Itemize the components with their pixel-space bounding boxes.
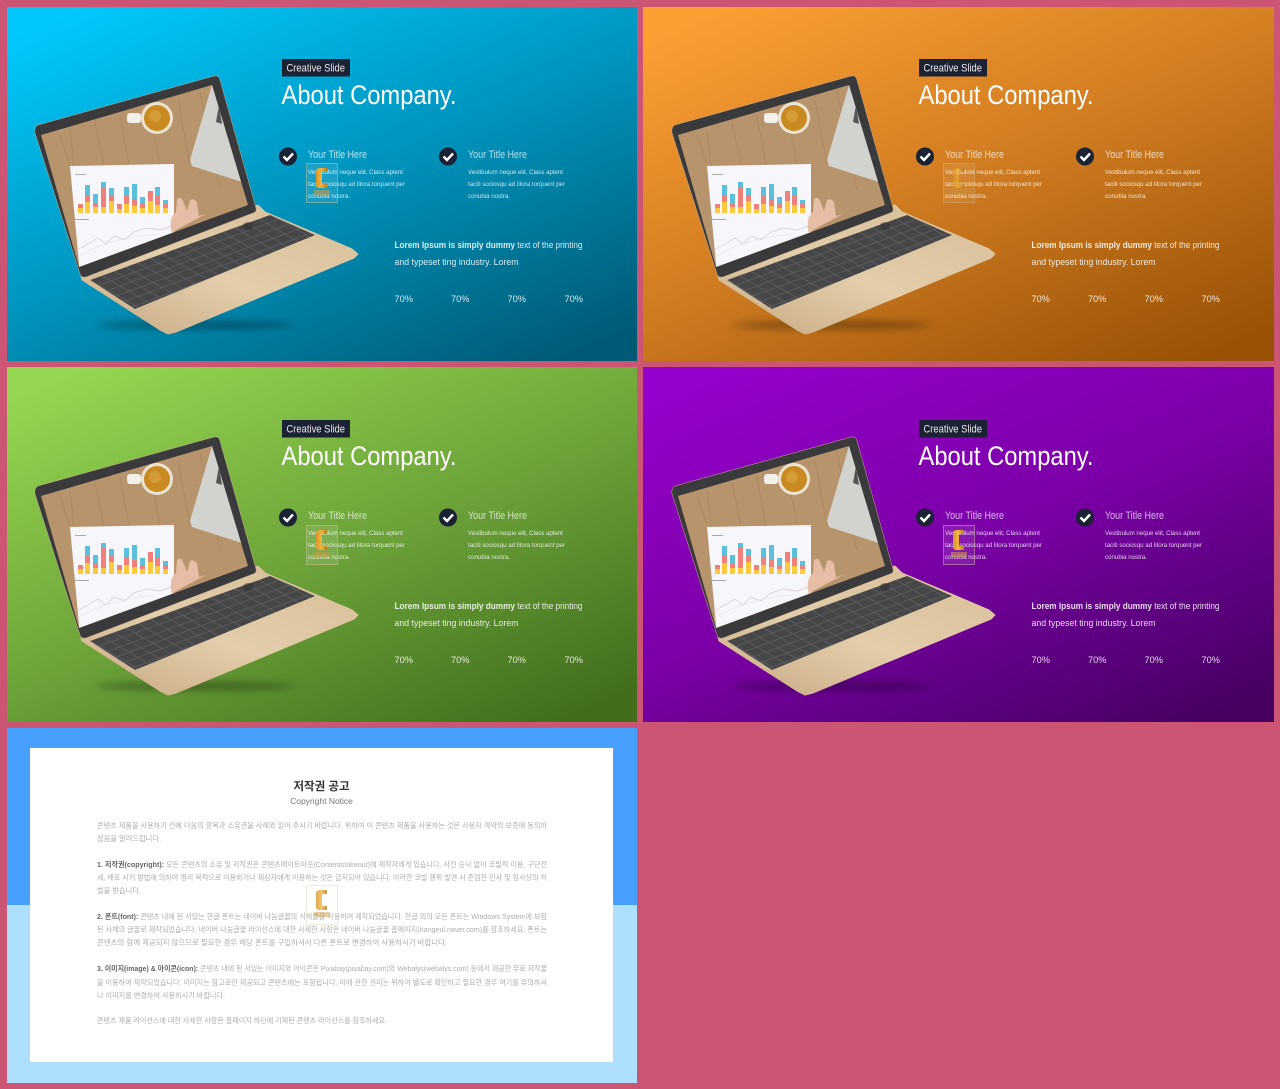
- feature 2: conubia nostra.: [468, 554, 510, 561]
- feature 1: [916, 508, 1043, 561]
- notice section 3: [97, 964, 547, 1000]
- laptop mockup: [672, 437, 995, 695]
- notice section 1: [97, 860, 547, 895]
- notice section 1: 세, 배포 시키 방법에 의하여 영리 목적으로 이용하거나 제삼자에게 이용하는 것은 금지되어 있습니다. 이러한 코빌 행위 발견 시 준엄한 민사 및 형사상의 처: [97, 873, 547, 882]
- notice section 3: 나 이미지를 변경하여 사용하시기 바랍니다.: [97, 991, 225, 1000]
- tag: Creative Slide: Creative Slide: [286, 424, 345, 436]
- feature 2: conubia nostra.: [1105, 193, 1147, 200]
- notice section 2: 2. 폰트(font): 콘텐츠 내에 된 서있는 한글 폰트는 네이버 나눔글꼴의 서체들을 사용하여 제작되었습니다. 한글 외의 모든 폰트는 Windows System에 보함: [97, 912, 547, 921]
- percentages: 70%: [564, 294, 584, 305]
- tag: Creative Slide: [282, 420, 350, 438]
- feature 1: taciti sociosqu ad litora torquent per: [308, 181, 406, 188]
- laptop mockup: [672, 76, 995, 334]
- percentages: 70%: [1202, 655, 1221, 666]
- percentages: 70%: [1202, 294, 1221, 305]
- description: and typeset ting industry. Lorem: [394, 618, 519, 629]
- feature 2: [1076, 508, 1203, 561]
- laptop mockup: [35, 437, 358, 695]
- feature 1: [916, 148, 1043, 200]
- watermark: [306, 164, 338, 202]
- percentages: 70%: [1032, 655, 1051, 666]
- tag: Creative Slide: [282, 59, 350, 76]
- percentages: 70%: [508, 294, 527, 305]
- feature 2: taciti sociosqu ad litora torquent per: [468, 542, 566, 549]
- feature 1: conubia nostra.: [308, 554, 350, 561]
- description: and typeset ting industry. Lorem: [1032, 257, 1156, 268]
- watermark: [944, 526, 974, 564]
- percentages: 70%: [1088, 655, 1107, 666]
- notice intro: 셨음을 알려드립니다.: [97, 834, 161, 843]
- feature 1: Vestibulum neque elit, Class aptent: [945, 169, 1040, 176]
- feature 1: conubia nostra.: [308, 193, 350, 200]
- tag: Creative Slide: Creative Slide: [924, 62, 982, 74]
- watermark: [306, 886, 338, 924]
- tag: Creative Slide: [919, 59, 987, 76]
- notice heading: 저작권 공고: [293, 779, 350, 793]
- feature 2: [439, 508, 566, 561]
- percentages: 70%: [508, 655, 527, 666]
- description: [1032, 601, 1220, 629]
- notice closing: 콘텐츠 제품 라이선스에 대한 사세한 사항은 홈페이지 하단에 기재된 콘텐츠 라이선스를 참조하세요.: [97, 1016, 387, 1025]
- feature 2: [1076, 148, 1203, 200]
- feature 1: Vestibulum neque elit, Class aptent: [308, 169, 403, 176]
- description: [394, 240, 582, 268]
- feature 1: Your Title Here: [945, 510, 1004, 522]
- watermark: [306, 526, 338, 564]
- panel: blue slide: [7, 7, 637, 361]
- notice intro: [97, 821, 547, 843]
- notice intro: 콘텐츠 제품을 사용하기 전에 다음의 항목과 소유권을 사례와 읽어 주시기 바랍니다. 위하여 이 콘텐츠 제품을 사용하는 것은 사용자 계약의 보증에 동의하: [97, 821, 547, 830]
- percentages: 70%: [394, 294, 414, 305]
- notice section 1: 1. 저작권(copyright): 모든 콘텐츠의 소유 및 저작권은 콘텐츠메이트아웃(Contentstokeout)에 제작자에게 있습니다. 사전 승낙 없이 코빌적 이용, 구단전: [97, 860, 547, 869]
- feature 2: taciti sociosqu ad litora torquent per: [1105, 181, 1203, 188]
- description: and typeset ting industry. Lorem: [1032, 618, 1156, 629]
- title: About Company.: [918, 441, 1094, 471]
- feature 2: taciti sociosqu ad litora torquent per: [1105, 542, 1203, 549]
- title: About Company.: [918, 80, 1094, 110]
- feature 2: Your Title Here: [1105, 149, 1164, 161]
- percentages: [394, 655, 584, 666]
- feature 1: Vestibulum neque elit, Class aptent: [945, 530, 1040, 537]
- notice section 2: [97, 912, 547, 947]
- description: Lorem Ipsum is simply dummy text of the printing: [1032, 601, 1220, 612]
- feature 2: Vestibulum neque elit, Class aptent: [468, 169, 563, 176]
- title: About Company.: [282, 441, 456, 471]
- notice section 3: 을 이용하여 제작되었습니다. 이미지는 참고로만 제공되고 콘텐츠에는 포함됩니다. 이에 관한 권리는 위하여 별도로 확인하고 필요한 경우 여기를 유의하셔: [97, 978, 547, 987]
- notice section 1: 벌을 받습니다.: [97, 886, 141, 895]
- notice section 2: 된 사체의 글꼴로 제작되었습니다. 네이버 나눔글꼴 라이선스에 대한 사세한 사항은 네이버 나눔글꼴 홈페이지(hangeul.naver.com)를 참조하세요. 폰트는: [97, 925, 547, 934]
- description: Lorem Ipsum is simply dummy text of the printing: [394, 240, 582, 251]
- percentages: [1032, 655, 1221, 666]
- panel: purple slide: [643, 367, 1274, 722]
- notice section 3: 3. 이미지(image) & 아이콘(icon): 콘텐츠 내에 된 서있는 이미지와 아이콘은 Pixabay(pixabay.com)와 Webalys(webalys.com) 등에서 제공한 무료 저작물: [97, 964, 547, 973]
- feature 1: Vestibulum neque elit, Class aptent: [308, 530, 403, 537]
- percentages: 70%: [564, 655, 584, 666]
- panel: green slide: [7, 367, 637, 722]
- feature 1: conubia nostra.: [945, 193, 987, 200]
- watermark: [944, 164, 974, 202]
- feature 2: Your Title Here: [1105, 510, 1164, 522]
- notice heading: Copyright Notice: [290, 796, 353, 806]
- description: Lorem Ipsum is simply dummy text of the printing: [394, 601, 582, 612]
- feature 1: taciti sociosqu ad litora torquent per: [945, 542, 1043, 549]
- feature 1: taciti sociosqu ad litora torquent per: [308, 542, 406, 549]
- notice heading: [290, 779, 353, 806]
- feature 2: [439, 148, 566, 200]
- feature 2: Your Title Here: [468, 149, 527, 161]
- feature 2: Vestibulum neque elit, Class aptent: [1105, 530, 1200, 537]
- percentages: 70%: [1144, 655, 1164, 666]
- description: [1032, 240, 1220, 268]
- feature 1: conubia nostra.: [945, 554, 987, 561]
- feature 2: conubia nostra.: [1105, 554, 1147, 561]
- feature 2: taciti sociosqu ad litora torquent per: [468, 181, 566, 188]
- feature 1: [279, 508, 406, 561]
- laptop mockup: [35, 76, 358, 334]
- percentages: 70%: [1088, 294, 1107, 305]
- feature 1: Your Title Here: [308, 510, 367, 522]
- feature 1: [279, 148, 406, 200]
- feature 2: Your Title Here: [468, 510, 527, 522]
- percentages: 70%: [451, 655, 470, 666]
- percentages: [1032, 294, 1221, 305]
- panel: copyright notice: [7, 728, 637, 1083]
- tag: Creative Slide: Creative Slide: [924, 424, 982, 436]
- feature 1: taciti sociosqu ad litora torquent per: [945, 181, 1043, 188]
- description: Lorem Ipsum is simply dummy text of the printing: [1032, 240, 1220, 251]
- percentages: 70%: [1032, 294, 1051, 305]
- title: About Company.: [282, 80, 456, 110]
- tag: Creative Slide: [919, 420, 987, 438]
- feature 2: Vestibulum neque elit, Class aptent: [1105, 169, 1200, 176]
- panel: orange slide: [643, 7, 1274, 361]
- description: and typeset ting industry. Lorem: [394, 257, 519, 268]
- description: [394, 601, 582, 629]
- feature 2: conubia nostra.: [468, 193, 510, 200]
- percentages: [394, 294, 584, 305]
- notice section 2: 콘텐츠의 함께 제공되지 않으므로 필요한 경우 해당 폰트를 구입하셔서 다른 폰트로 변경하여 사용하시기 바랍니다.: [97, 938, 447, 947]
- percentages: 70%: [394, 655, 414, 666]
- feature 1: Your Title Here: [308, 149, 367, 161]
- tag: Creative Slide: Creative Slide: [286, 62, 345, 74]
- percentages: 70%: [451, 294, 470, 305]
- feature 2: Vestibulum neque elit, Class aptent: [468, 530, 563, 537]
- percentages: 70%: [1144, 294, 1164, 305]
- feature 1: Your Title Here: [945, 149, 1004, 161]
